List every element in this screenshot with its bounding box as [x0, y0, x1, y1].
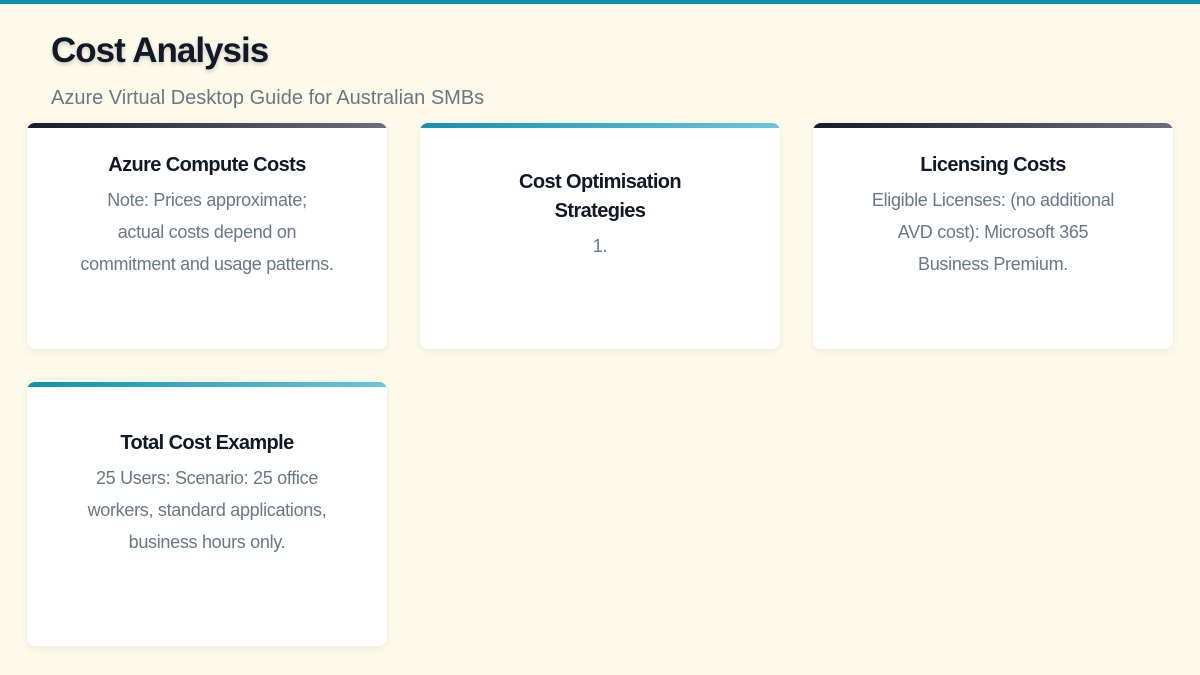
panel: cost optimisation strategies [420, 123, 780, 349]
text: scenario [88, 468, 326, 552]
text: scenario: business hours only. [129, 532, 285, 552]
text: licensing note: Eligible Licenses: (no additional [872, 190, 1114, 210]
text: scenario: 25 Users: Scenario: 25 office [96, 468, 318, 488]
text: licensing note: AVD cost): Microsoft 365 [898, 222, 1088, 242]
heading: azure compute costs: Azure Compute Costs [108, 154, 306, 176]
text: scenario: workers, standard applications, [88, 500, 326, 520]
panel: licensing costs [813, 123, 1173, 349]
panel: total cost example [27, 382, 387, 646]
subtitle: Azure Virtual Desktop Guide for Australian SMBs [51, 87, 484, 109]
text: compute note: Note: Prices approximate; [107, 190, 307, 210]
text: compute note [80, 190, 334, 274]
text: compute note: commitment and usage patterns. [80, 254, 334, 274]
heading: cost optimisation strategies: Cost Optimisation Strategies [519, 171, 681, 222]
panel: azure compute costs [27, 123, 387, 349]
text: list item: 1. [593, 236, 607, 256]
heading: licensing costs: Licensing Costs [920, 154, 1066, 176]
text: licensing note: Business Premium. [918, 254, 1068, 274]
heading: total cost example: Total Cost Example [120, 432, 294, 454]
title: Cost Analysis [51, 31, 268, 70]
text: licensing note [872, 190, 1114, 274]
text: compute note: actual costs depend on [118, 222, 296, 242]
